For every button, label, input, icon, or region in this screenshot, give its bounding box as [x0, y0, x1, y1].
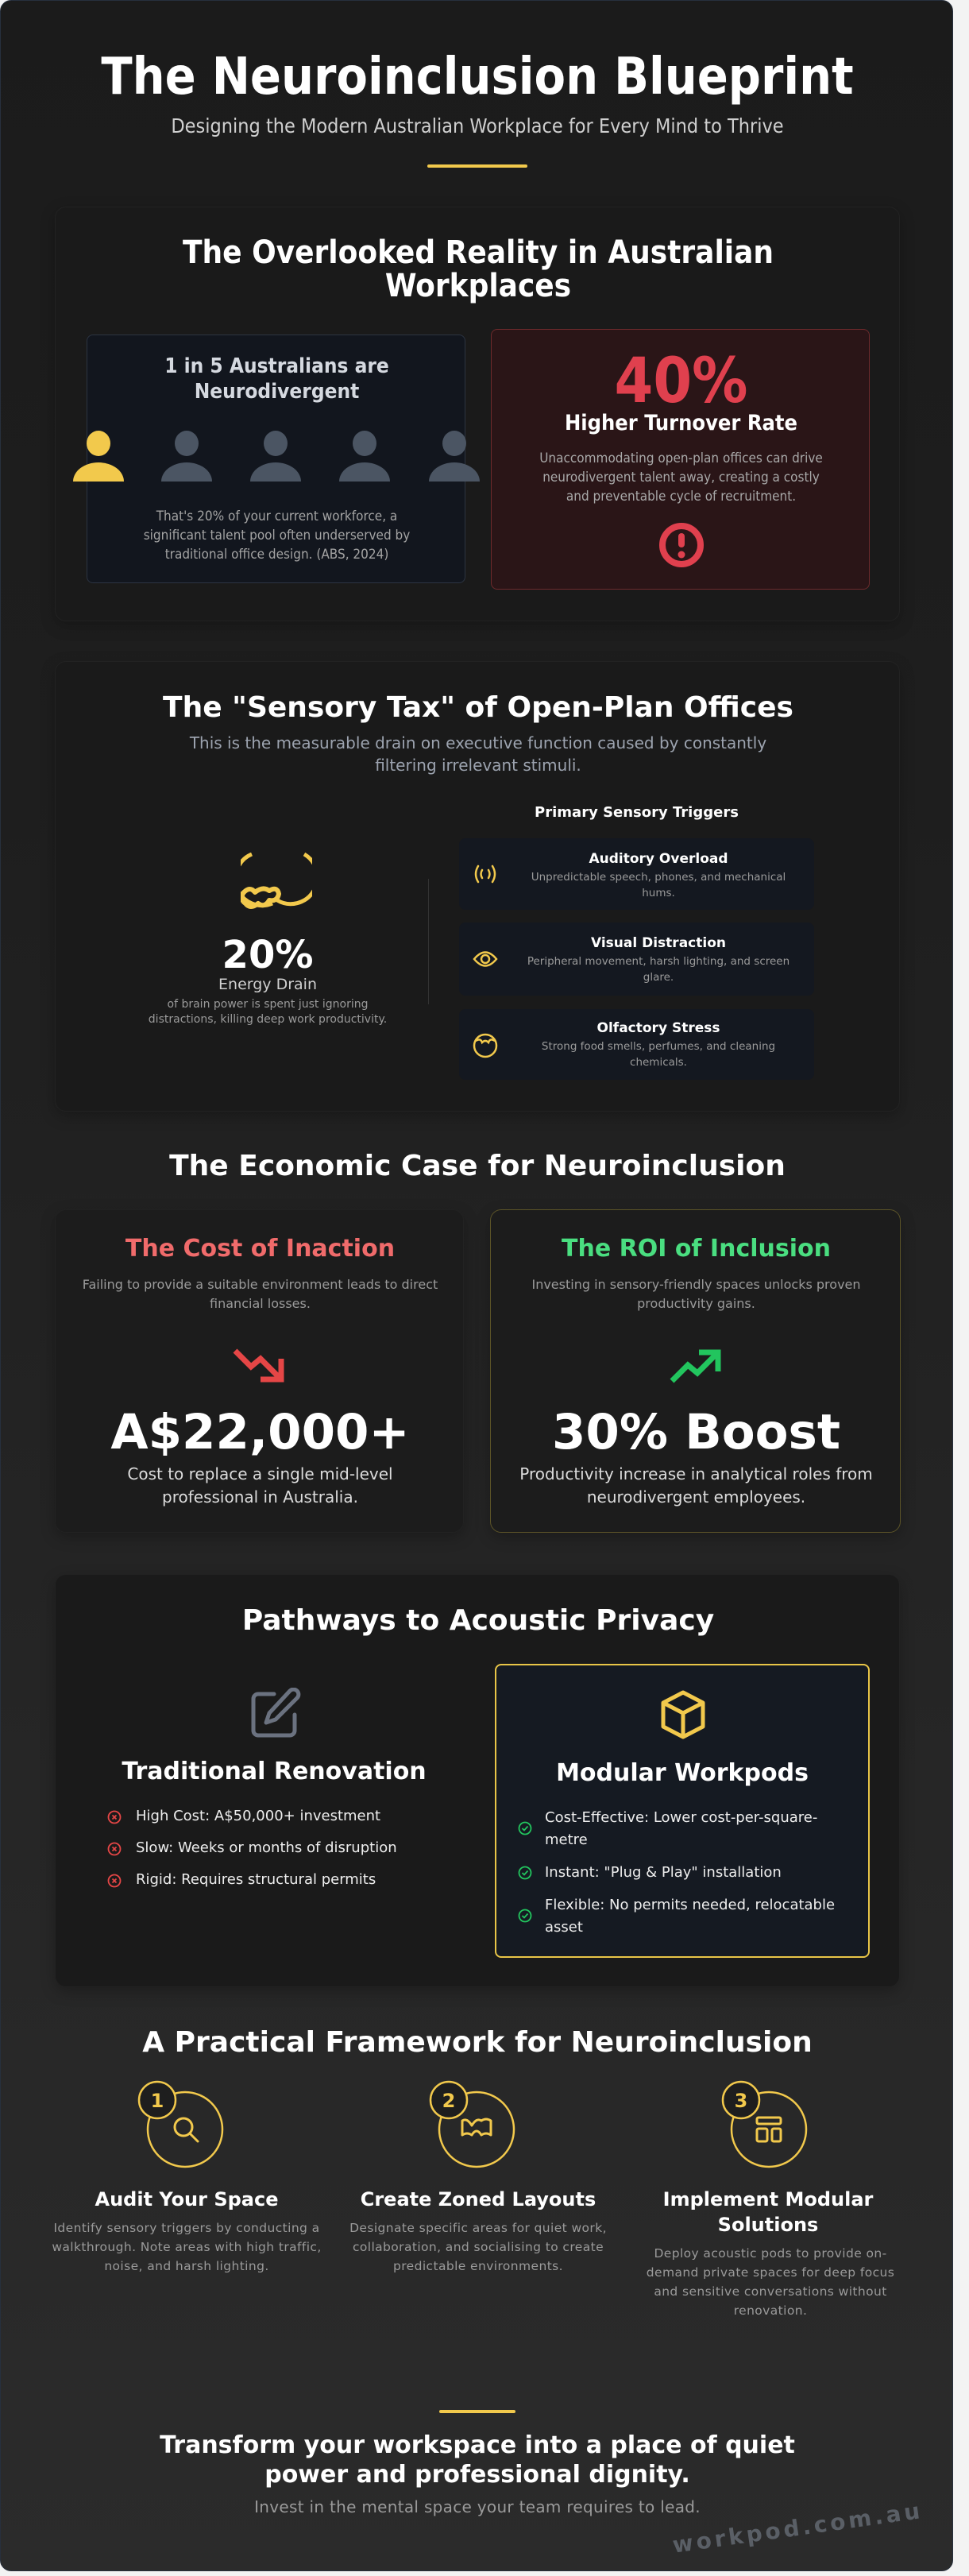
stat label: Higher Turnover Rate [565, 411, 797, 435]
icon: eye [473, 951, 497, 967]
card: 40% turnover [491, 329, 870, 590]
card: cost of inaction [55, 1209, 464, 1533]
icon: trend up [670, 1349, 721, 1383]
footer subtitle: Invest in the mental space your team requires to lead. [254, 2497, 701, 2516]
list: cons: Slow: Weeks or months of disruption [136, 1839, 397, 1856]
icon: layout with badge [721, 2080, 807, 2168]
panel: overlooked reality [55, 207, 900, 621]
icon: pencil [251, 1688, 300, 1737]
card title: The ROI of Inclusion [562, 1235, 831, 1263]
icon: trend down [234, 1349, 284, 1383]
icon: map with badge: 2 [442, 2090, 455, 2112]
energy drain block [149, 853, 387, 1026]
step description: Identify sensory triggers by conducting a walkthrough. Note areas with high traffic, noise, and harsh lighting. [52, 2221, 322, 2273]
step title: Create Zoned Layouts [361, 2188, 596, 2210]
list: pros: Cost-Effective: Lower cost-per-square-metre [545, 1809, 817, 1848]
stat description: Productivity increase in analytical roles from neurodivergent employees. [519, 1464, 873, 1507]
stat: 30% Boost: 30% Boost [552, 1404, 840, 1460]
heading: Traditional Renovation [122, 1758, 427, 1785]
card heading: Neurodivergent [195, 380, 359, 404]
heading: overlooked reality: The Overlooked Reality in Australian [183, 234, 774, 271]
watermark: workpod.com.au [671, 2497, 925, 2559]
trigger: visual: Peripheral movement, harsh lighting, and screen glare. [527, 955, 789, 984]
icon: layout with badge: 3 [735, 2090, 747, 2112]
list: pros: Instant: "Plug & Play" installation [545, 1864, 782, 1881]
description: Investing in sensory-friendly spaces unlocks proven productivity gains. [531, 1277, 861, 1311]
heading: overlooked reality: Workplaces [385, 268, 571, 304]
step 1 [52, 2080, 322, 2273]
description: Failing to provide a suitable environment leads to direct financial losses. [83, 1277, 438, 1311]
heading: sensory tax: The "Sensory Tax" of Open-Plan Offices [163, 691, 793, 724]
list: pros [518, 1809, 835, 1936]
card text: That's 20% of your current workforce, a significant talent pool often underserved by traditional office design. (ABS, 2024) [144, 509, 410, 563]
icon: search with badge: 1 [151, 2090, 164, 2112]
label: Energy Drain [218, 976, 317, 993]
icon: search with badge [138, 2080, 224, 2168]
trigger: olfactory [459, 1009, 814, 1080]
stat: A$22,000+: A$22,000+ [110, 1404, 410, 1460]
icon: sound [475, 864, 496, 884]
trigger: auditory: Auditory Overload [589, 851, 728, 867]
list: cons [108, 1808, 397, 1888]
stat: 20%: 20% [222, 933, 313, 977]
title: The Neuroinclusion Blueprint [101, 48, 854, 106]
trigger: auditory: Unpredictable speech, phones, and mechanical hums. [531, 871, 786, 899]
card: modular workpods [495, 1664, 870, 1958]
icon: cube [661, 1691, 705, 1739]
icon: people row [73, 431, 480, 482]
step title: Solutions [718, 2214, 818, 2236]
panel: sensory tax [55, 661, 900, 1112]
card: 1 in 5 [87, 335, 465, 583]
heading: practical framework: A Practical Framework for Neuroinclusion [142, 2026, 813, 2059]
heading: overlooked reality [183, 234, 774, 304]
heading: Modular Workpods [556, 1759, 809, 1787]
trigger: olfactory: Olfactory Stress [597, 1020, 720, 1036]
card: ROI of inclusion [490, 1209, 901, 1533]
heading: primary sensory triggers: Primary Sensory Triggers [535, 804, 739, 821]
description: Unaccommodating open-plan offices can drive neurodivergent talent away, creating a costly and preventable cycle of recruitment. [539, 451, 823, 505]
icon: nose [473, 1033, 497, 1058]
trigger: auditory [459, 838, 814, 910]
trigger: olfactory: Strong food smells, perfumes, and cleaning chemicals. [542, 1040, 775, 1069]
description: of brain power is spent just ignoring distractions, killing deep work productivity. [149, 998, 387, 1026]
card heading [164, 354, 389, 404]
card title: The Cost of Inaction [125, 1235, 395, 1263]
heading: economic case: The Economic Case for Neuroinclusion [169, 1150, 786, 1182]
list: cons: High Cost: A$50,000+ investment [136, 1808, 380, 1824]
card heading: 1 in 5 Australians are [164, 354, 389, 378]
step description: Designate specific areas for quiet work, collaboration, and socialising to create predictable environments. [349, 2221, 607, 2273]
icon: alert [659, 523, 704, 567]
icon: brain [241, 853, 312, 909]
step title: Implement Modular [663, 2188, 873, 2210]
stat: 40%: 40% [615, 346, 747, 417]
step 3 [647, 2080, 894, 2318]
step title [663, 2188, 874, 2236]
list: pros: Flexible: No permits needed, relocatable asset [545, 1897, 835, 1936]
subtitle: This is the measurable drain on executive function caused by constantly filtering irrelevant stimuli. [190, 733, 766, 775]
step description: Deploy acoustic pods to provide on-demand private spaces for deep focus and sensitive conversations without renovation. [647, 2246, 894, 2318]
footer heading: Transform your workspace into a place of quiet power and professional dignity. [160, 2431, 795, 2489]
column: traditional renovation [108, 1688, 427, 1888]
subtitle: Designing the Modern Australian Workplace for Every Mind to Thrive [171, 114, 784, 137]
list: cons: Rigid: Requires structural permits [136, 1871, 376, 1888]
trigger: visual: Visual Distraction [591, 935, 726, 951]
step title: Audit Your Space [95, 2188, 278, 2210]
icon: map with badge [429, 2080, 515, 2168]
step 2 [349, 2080, 607, 2273]
trigger: visual [459, 922, 814, 996]
stat description: Cost to replace a single mid-level professional in Australia. [127, 1464, 393, 1507]
panel: pathways [55, 1574, 900, 1987]
heading: pathways: Pathways to Acoustic Privacy [242, 1604, 714, 1637]
